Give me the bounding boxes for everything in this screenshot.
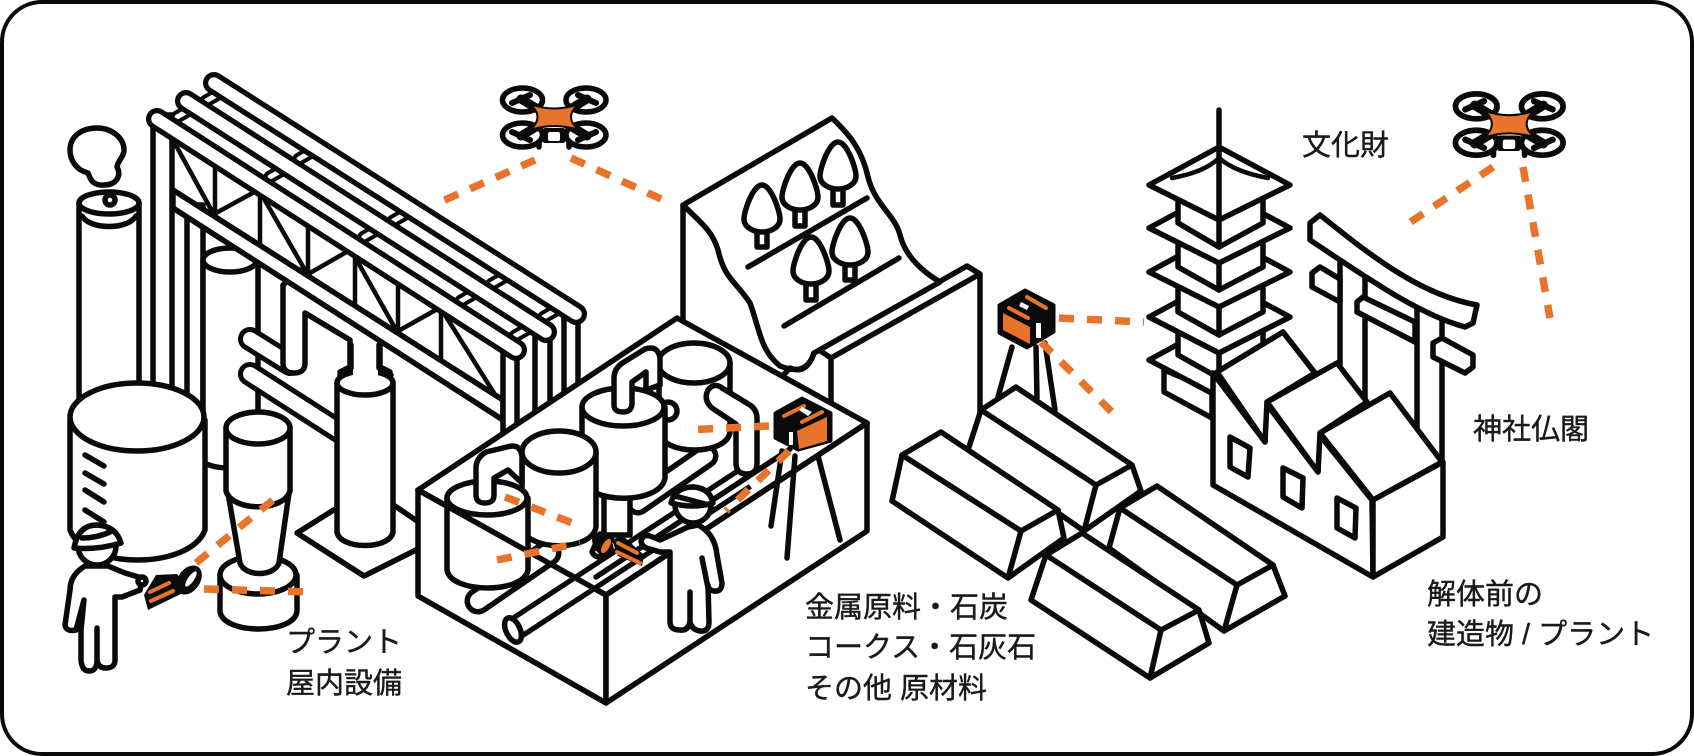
tripod [771, 451, 840, 558]
worker at the box [641, 487, 722, 631]
wall 1 [1178, 195, 1263, 247]
tank 1 [447, 481, 528, 588]
tank 3 [582, 388, 665, 498]
roof 2 [1149, 190, 1290, 263]
label: shrines and temples: 神社仏閣 [1473, 413, 1589, 446]
pagoda [1149, 110, 1290, 418]
tree 2 [782, 163, 818, 226]
tank 3 elbow [614, 348, 660, 412]
torii gate [1310, 215, 1477, 470]
label: indoor plant equipment [286, 627, 402, 700]
hill front edge [683, 205, 814, 370]
ingot left [892, 432, 1064, 578]
tree 3 [820, 142, 856, 205]
side wall [1373, 462, 1443, 577]
truss web [173, 140, 494, 393]
tripod scanner [775, 398, 831, 450]
open box with plant equipment [418, 318, 867, 703]
label: indoor plant equipment: 屋内設備 [286, 667, 402, 700]
label: raw materials: その他 原材料 [805, 672, 987, 705]
handheld scanner [144, 561, 207, 610]
tank 1 elbow [476, 446, 522, 503]
wall 3 [1178, 280, 1263, 335]
roof 5 [1149, 322, 1290, 397]
near edges [418, 423, 867, 595]
chimney [79, 192, 139, 440]
tank 4 [658, 343, 730, 450]
left tie stub [1312, 267, 1340, 302]
right tie stub [1433, 338, 1473, 373]
plant structure: posts, pipes and truss [153, 83, 578, 576]
label: buildings before demolition: 建造物 / プラント [1427, 618, 1654, 651]
retaining wall edges [831, 274, 980, 415]
tank 3 support [604, 490, 630, 535]
roof 3 [1320, 393, 1442, 500]
label: buildings before demolition [1427, 578, 1654, 651]
top beam [1310, 215, 1477, 327]
wall 2 [1178, 235, 1263, 290]
roof 1 [1217, 332, 1315, 442]
back cylinder [203, 248, 258, 468]
retaining wall cap [819, 266, 980, 358]
tripod, centre right [998, 343, 1055, 410]
column [337, 345, 393, 546]
base plate [297, 506, 420, 576]
ingot right [1109, 486, 1285, 631]
rail line [596, 449, 790, 577]
lower truss rail [173, 190, 503, 420]
retaining wall fill [829, 274, 980, 420]
ingot front [1031, 533, 1209, 678]
metal ingots [892, 387, 1285, 678]
hillside terrain [683, 118, 980, 420]
beam connectors [177, 93, 558, 336]
drone, right [1455, 94, 1563, 155]
roof 4 [1149, 279, 1290, 353]
label: raw materials: 金属原料・石炭 [805, 591, 1008, 624]
label: buildings before demolition: 解体前の [1427, 578, 1543, 611]
horizontal pipes [250, 339, 345, 435]
tree 1 [744, 185, 780, 247]
tripod scanner, centre right [999, 290, 1054, 348]
base rail right [638, 456, 706, 503]
drone, left [502, 88, 606, 147]
handheld scanner, centre [588, 528, 644, 566]
scan beams: orange dashed lines [196, 158, 1550, 592]
roof 1 [1149, 147, 1290, 220]
label: raw materials [805, 591, 1036, 705]
label: raw materials: コークス・石灰石 [805, 632, 1036, 664]
ingot back [968, 387, 1141, 531]
top beams [157, 83, 576, 350]
lower box [1164, 370, 1212, 418]
hill slope [683, 118, 940, 400]
elbow pipe [283, 270, 390, 385]
contour lines [748, 198, 899, 326]
spire [1216, 110, 1222, 150]
roof 2 [1267, 363, 1367, 472]
tree 4 [793, 237, 829, 300]
roof 3 [1149, 234, 1290, 307]
tube pipe [501, 478, 745, 645]
tank 2 [522, 431, 596, 546]
torii pillars [1340, 250, 1365, 420]
tank 3 knob [659, 402, 677, 420]
label: indoor plant equipment: プラント [286, 627, 402, 659]
cyclone unit [220, 412, 297, 629]
storage tank [70, 383, 205, 560]
factory building [1213, 332, 1443, 577]
base rail left [478, 553, 548, 601]
wall 4 [1178, 325, 1263, 378]
tree 5 [832, 218, 868, 280]
windows [1230, 437, 1250, 477]
icon: smoke [70, 128, 124, 185]
right bent pipe [706, 385, 757, 474]
label: cultural property: 文化財 [1302, 129, 1389, 162]
worker with handheld scanner, left [65, 525, 207, 671]
middle tie [1357, 297, 1415, 342]
